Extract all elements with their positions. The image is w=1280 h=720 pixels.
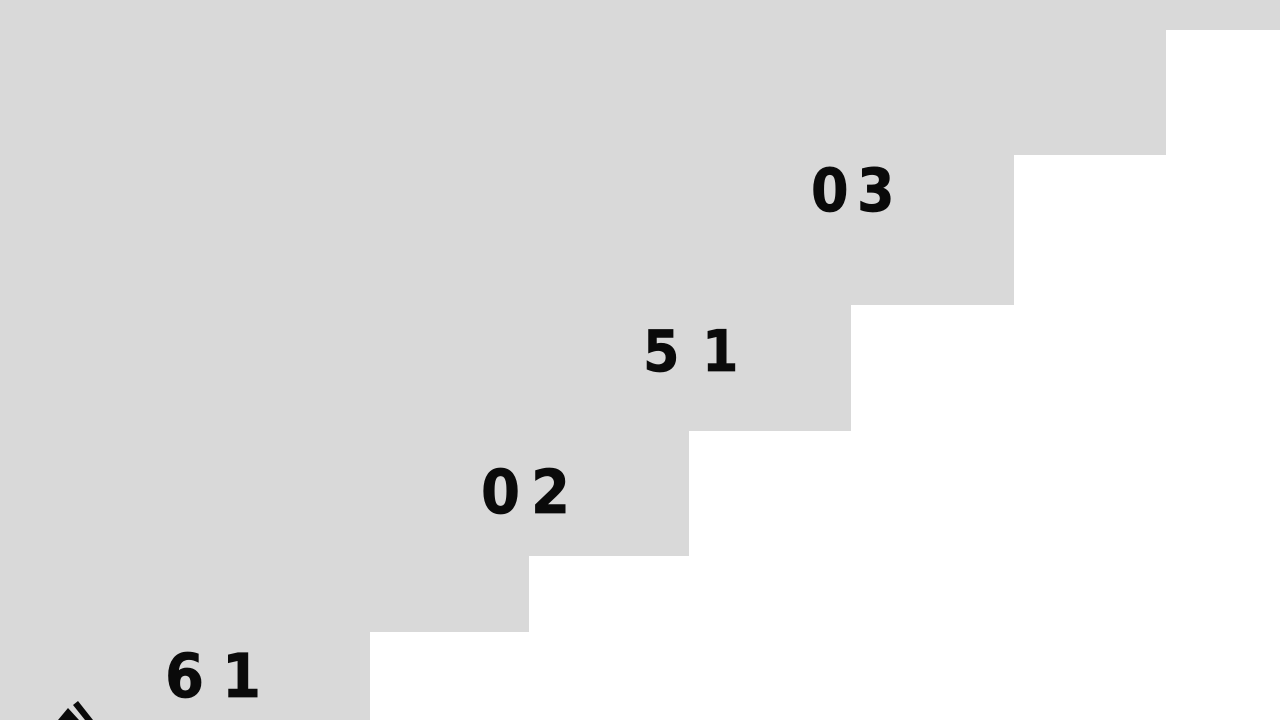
number: 51: 1 — [702, 318, 738, 385]
number: 51 — [643, 318, 738, 385]
number: 03 — [811, 156, 895, 226]
number: 51: 5 — [643, 318, 679, 385]
number: 02 — [481, 457, 570, 528]
number: 02: 0 — [481, 457, 520, 528]
icon: cropped black triangle with chevron band — [58, 701, 93, 720]
number: 61 — [165, 641, 261, 712]
number: 61: 6 — [165, 641, 204, 712]
number: 03: 3 — [857, 156, 895, 226]
number: 03: 0 — [811, 156, 849, 226]
number: 61: 1 — [222, 641, 261, 712]
number: 02: 2 — [531, 457, 570, 528]
